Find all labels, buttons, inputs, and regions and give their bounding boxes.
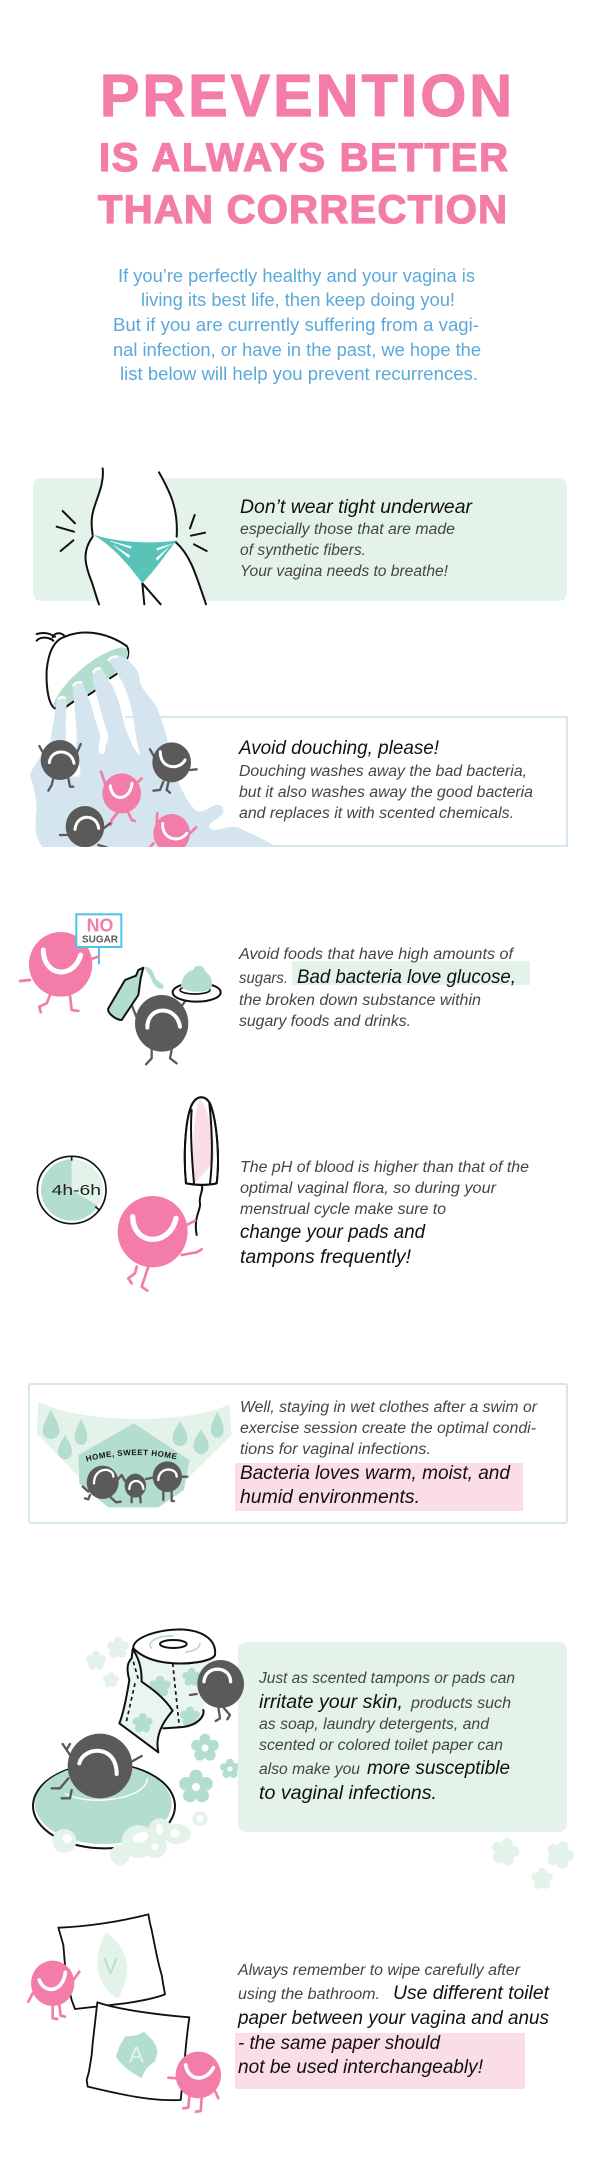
- bacterium: pink on paper V: [28, 1961, 79, 2019]
- intro text: nal infection, or have in the past, we hope the: [113, 340, 481, 360]
- text: underwear tip: especially those that are made: [240, 521, 455, 538]
- text: scented products tip: [258, 1670, 515, 1804]
- text: douching tip: and replaces it with scented chemicals.: [239, 805, 514, 822]
- bacterium: pink smile: [101, 772, 142, 825]
- illustration: wet underwear home: HOME, SWEET HOME!: [86, 1450, 177, 1462]
- bacteria family: [83, 1461, 187, 1502]
- bottle: [108, 967, 164, 1020]
- text: underwear tip: of synthetic fibers.: [240, 542, 366, 559]
- text: scented products tip: also make you: [259, 1761, 360, 1778]
- bacterium: gray smile: [150, 742, 197, 793]
- plate with cake: [173, 966, 221, 1002]
- icon: clock 4h-6h: [37, 1156, 106, 1224]
- bacterium: pink with no sugar sign: [20, 914, 121, 1012]
- text: tampon tip: menstrual cycle make sure to: [240, 1201, 446, 1218]
- title: IS ALWAYS BETTER: [99, 136, 508, 180]
- text: scented products tip: scented or colored toilet paper can: [259, 1737, 503, 1754]
- decorative flowers: [86, 1637, 578, 1889]
- text: paper tip: [235, 1962, 550, 2089]
- intro text: living its best life, then keep doing you!: [141, 290, 455, 310]
- text: sugar tip: [238, 946, 530, 1030]
- text: paper tip: not be used interchangeably!: [238, 2057, 484, 2078]
- text: paper tip: Use different toilet: [393, 1983, 550, 2004]
- bacterium: gray frown lower: [60, 806, 110, 847]
- bacterium: gray on soap: [52, 1734, 142, 1798]
- panel: change tampons: [37, 1097, 529, 1291]
- bacterium: pink on paper A: [168, 2052, 221, 2112]
- title: [98, 63, 512, 232]
- emphasis rays: [57, 511, 207, 551]
- illustration: water splash: [30, 656, 277, 848]
- illustration: scented toilet roll: [119, 1629, 215, 1752]
- illustration: hips and underwear: [57, 468, 207, 604]
- icon: tampon: [185, 1097, 218, 1235]
- icon: clock 4h-6h: 4h-6h: [52, 1183, 101, 1199]
- text: wet clothes tip: [235, 1399, 538, 1511]
- panel: avoid douching: [30, 632, 567, 853]
- text: douching tip: Douching washes away the bad bacteria,: [239, 763, 527, 780]
- intro text: But if you are currently suffering from a vagi-: [113, 315, 479, 335]
- text: tampon tip: The pH of blood is higher than that of the: [240, 1159, 529, 1176]
- sign: SUGAR: [82, 934, 118, 945]
- sign: [76, 914, 121, 964]
- bacterium: gray with bottle and cake: [108, 966, 221, 1064]
- card background: [238, 1642, 567, 1832]
- text: scented products tip: as soap, laundry detergents, and: [259, 1716, 490, 1733]
- text: wet clothes tip: exercise session create the optimal condi-: [240, 1420, 536, 1437]
- illustration: shower head: [37, 632, 128, 708]
- intro text: list below will help you prevent recurrences.: [120, 364, 478, 384]
- water nozzles: [59, 656, 117, 699]
- text: paper tip: - the same paper should: [238, 2033, 441, 2054]
- text: wet clothes tip: Bacteria loves warm, moist, and: [240, 1463, 511, 1484]
- text: sugar tip: Avoid foods that have high amounts of: [238, 946, 515, 963]
- title: THAN CORRECTION: [98, 188, 507, 232]
- bacterium: pink smile lower: [150, 813, 196, 853]
- text: paper tip: Always remember to wipe carefully after: [237, 1962, 521, 1979]
- intro text: [113, 266, 481, 384]
- illustration: toilet paper V: [58, 1914, 165, 2009]
- text: scented products tip: products such: [410, 1695, 511, 1712]
- illustration: toilet paper A: [87, 2002, 189, 2100]
- text: paper tip: using the bathroom.: [238, 1986, 380, 2003]
- house: [78, 1423, 189, 1507]
- panel: different paper: [28, 1914, 550, 2112]
- title: PREVENTION: [100, 63, 512, 129]
- teal flowers: [179, 1734, 240, 1802]
- text: wet clothes tip: tions for vaginal infections.: [240, 1441, 431, 1458]
- text: douching tip: Avoid douching, please!: [238, 738, 440, 759]
- sign: NO: [87, 915, 113, 936]
- bacterium: gray frown: [39, 740, 81, 791]
- text: paper tip: paper between your vagina and anus: [237, 2008, 549, 2029]
- illustration: soap: [33, 1734, 208, 1865]
- bubbles: [52, 1811, 208, 1865]
- bacterium: gray on toilet roll: [190, 1660, 244, 1721]
- illustration: toilet paper A: A: [129, 2042, 144, 2067]
- water drops: [43, 1410, 224, 1459]
- panel: avoid sugar: [20, 914, 530, 1064]
- text: tampon tip: optimal vaginal flora, so during your: [240, 1180, 497, 1197]
- text: douching tip: [238, 738, 533, 822]
- text: wet clothes tip: Well, staying in wet clothes after a swim or: [240, 1399, 538, 1416]
- text: tampon tip: change your pads and: [240, 1222, 426, 1243]
- text: scented products tip: irritate your skin,: [259, 1692, 403, 1713]
- text: wet clothes tip: humid environments.: [240, 1487, 420, 1508]
- text: tampon tip: [240, 1159, 529, 1268]
- text: sugar tip: sugars.: [239, 970, 288, 987]
- illustration: toilet paper V: V: [103, 1953, 118, 1978]
- text: tampon tip: tampons frequently!: [240, 1247, 412, 1268]
- text: underwear tip: Your vagina needs to breathe!: [240, 563, 449, 580]
- text: underwear tip: [240, 497, 473, 580]
- text: sugar tip: the broken down substance within: [239, 992, 481, 1009]
- panel: wet clothes: [28, 1383, 568, 1524]
- text: underwear tip: Don’t wear tight underwear: [240, 497, 473, 518]
- text: scented products tip: to vaginal infections.: [259, 1783, 437, 1804]
- text: sugar tip: sugary foods and drinks.: [239, 1013, 411, 1030]
- bacterium: pink with tampon: [118, 1196, 202, 1291]
- text: douching tip: but it also washes away the good bacteria: [239, 784, 533, 801]
- intro text: If you’re perfectly healthy and your vagina is: [118, 266, 475, 286]
- panel: scented products: [33, 1629, 578, 1889]
- text: scented products tip: Just as scented tampons or pads can: [258, 1670, 515, 1687]
- panel: tight underwear: [33, 468, 567, 604]
- text: scented products tip: more susceptible: [367, 1758, 510, 1779]
- text: sugar tip: Bad bacteria love glucose,: [297, 967, 516, 988]
- illustration: wet underwear home: [36, 1402, 232, 1508]
